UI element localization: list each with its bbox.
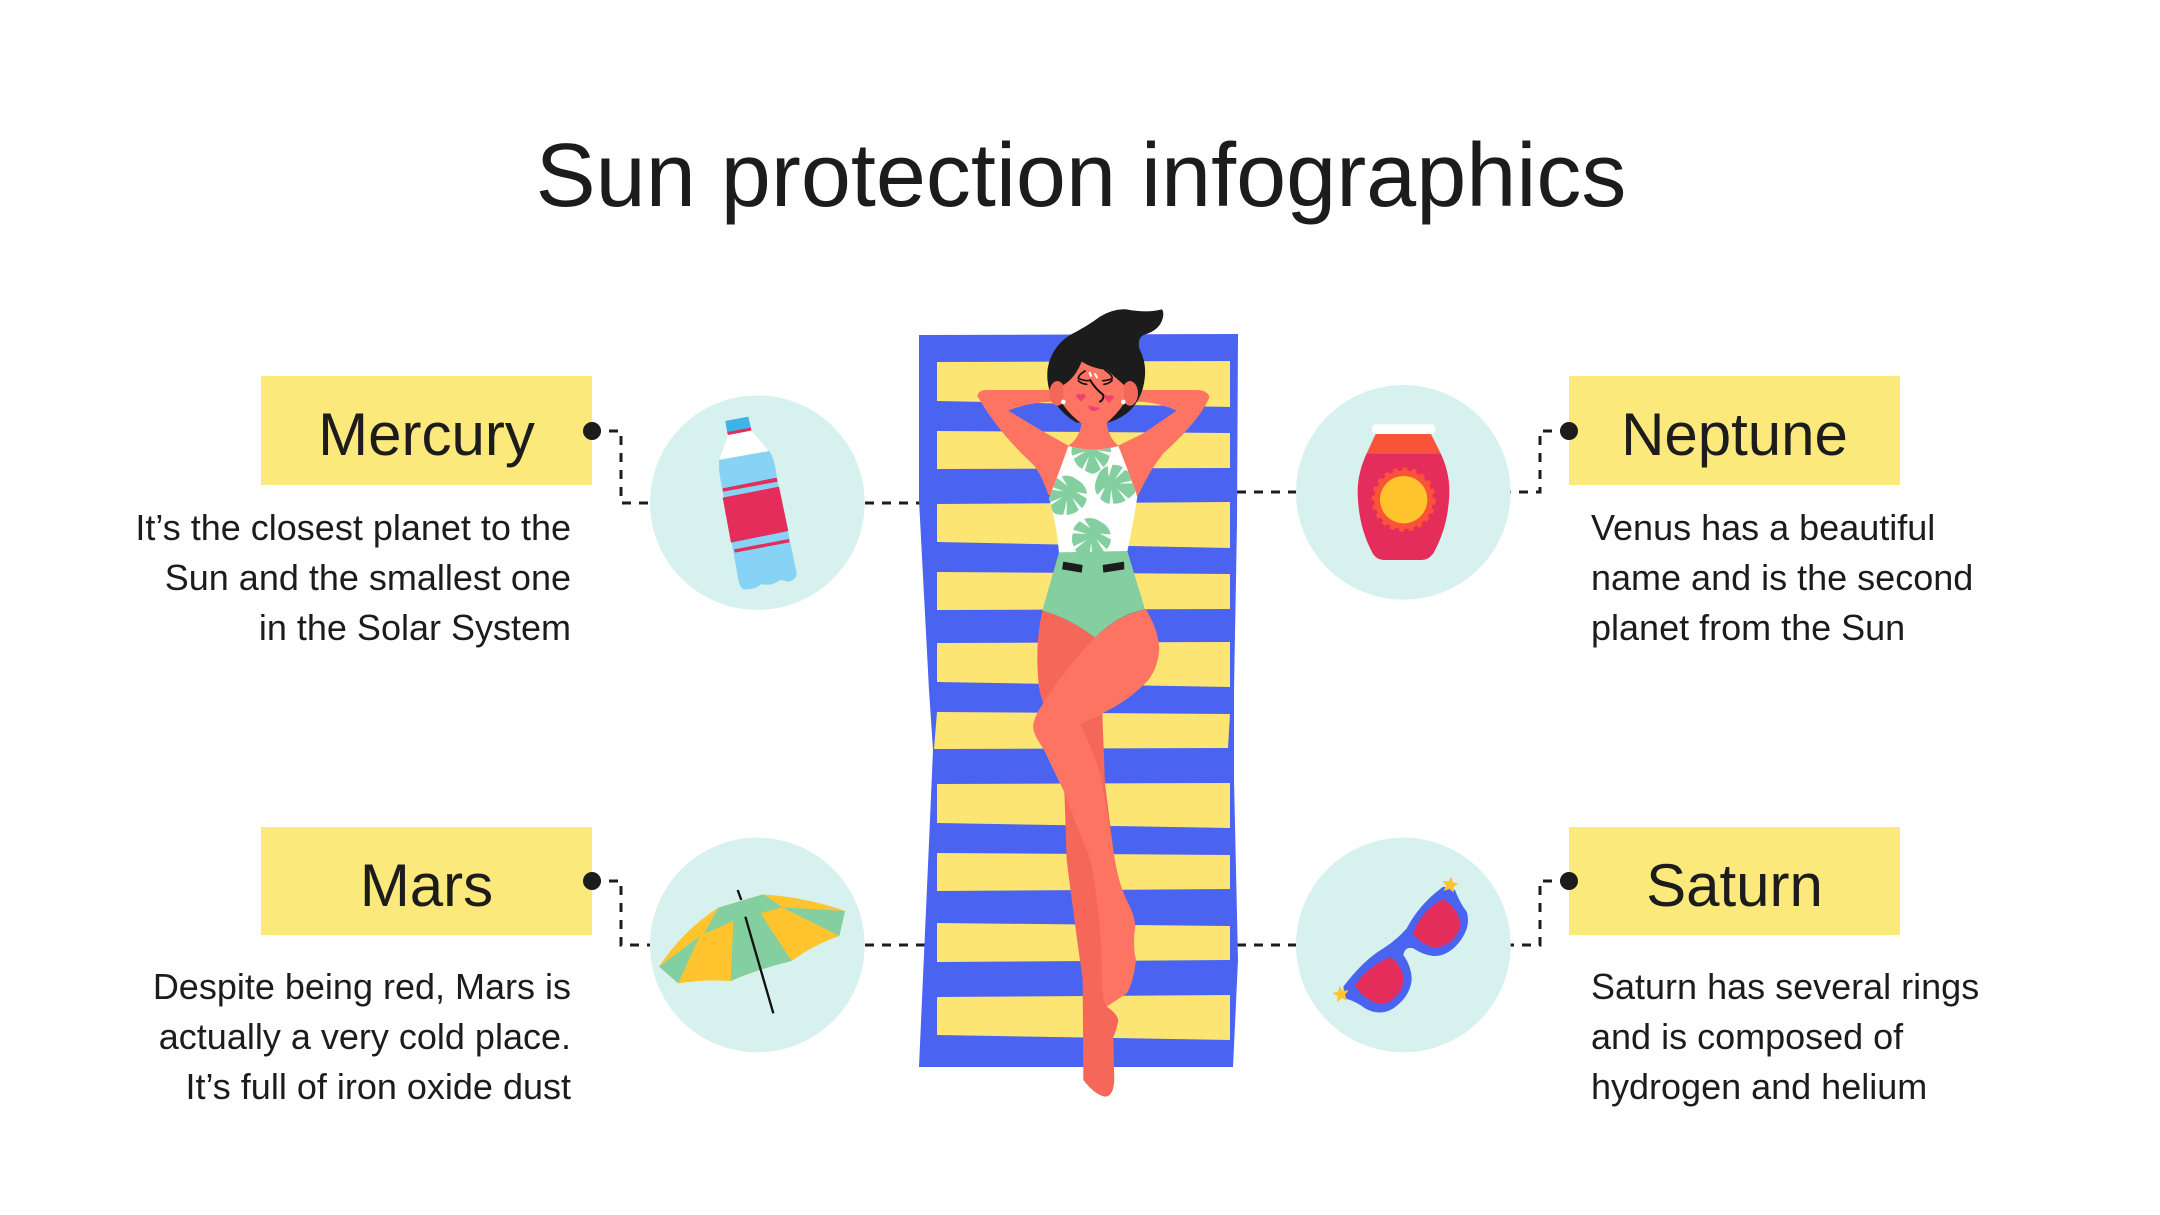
heading: Mercury: Mercury — [318, 401, 535, 468]
bent thigh shadow — [1037, 611, 1095, 703]
heading: Neptune: Neptune — [1621, 401, 1848, 468]
text block: Saturn: Saturn has several rings — [1591, 966, 1979, 1007]
towel — [919, 334, 1238, 1067]
text block: Mars: Despite being red, Mars is — [153, 966, 571, 1007]
heading: Mercury — [261, 376, 592, 485]
text block: Saturn: and is composed of — [1591, 1016, 1904, 1057]
text block: Neptune: name and is the second — [1591, 557, 1973, 598]
ear left — [1049, 381, 1065, 406]
icon: sunglasses — [1296, 838, 1511, 1052]
text block: Mercury: It’s the closest planet to the — [135, 507, 571, 548]
text block: Saturn: hydrogen and helium — [1591, 1066, 1927, 1107]
heading: Mars: Mars — [360, 852, 493, 919]
connector: Mercury — [583, 422, 925, 503]
heading: Neptune — [1569, 376, 1900, 485]
text block: Neptune: planet from the Sun — [1591, 607, 1905, 648]
text block: Mars: It’s full of iron oxide dust — [185, 1066, 571, 1107]
bent leg — [1033, 609, 1159, 1007]
hair — [1047, 309, 1163, 423]
earrings — [1061, 400, 1126, 404]
icon: sunscreen bottle — [1296, 385, 1511, 600]
text block: Mercury: in the Solar System — [259, 607, 571, 648]
swimsuit top — [1049, 446, 1137, 553]
illustration: sunbathing woman — [977, 309, 1209, 1097]
connector: Mars — [583, 872, 930, 945]
text block: Mercury: Sun and the smallest one — [165, 557, 571, 598]
icon: water bottle — [650, 395, 865, 610]
arms and torso — [977, 390, 1209, 495]
heading: Mars — [261, 827, 592, 935]
panel: Mars — [153, 827, 592, 1107]
swimsuit bottom — [1042, 551, 1145, 638]
title: Sun protection infographics — [536, 126, 1626, 226]
face — [1063, 362, 1124, 425]
leaf pattern — [1049, 447, 1136, 552]
heading: Saturn: Saturn — [1646, 852, 1823, 919]
panel: Mercury — [135, 376, 592, 648]
panel: Saturn — [1569, 827, 1979, 1107]
lower leg — [1064, 713, 1118, 1097]
connector: Saturn — [1232, 872, 1578, 945]
icon: beach umbrella — [650, 838, 865, 1052]
panel: Neptune — [1569, 376, 1973, 648]
swimsuit belt loops — [1062, 562, 1124, 573]
connector: Neptune — [1232, 422, 1578, 492]
facial features — [1078, 370, 1112, 402]
heading: Saturn — [1569, 827, 1900, 935]
text block: Mars: actually a very cold place. — [159, 1016, 571, 1057]
text block: Neptune: Venus has a beautiful — [1591, 507, 1935, 548]
forehead highlights — [1089, 372, 1097, 378]
cheeks and lips — [1076, 394, 1114, 411]
ear right — [1122, 381, 1138, 406]
